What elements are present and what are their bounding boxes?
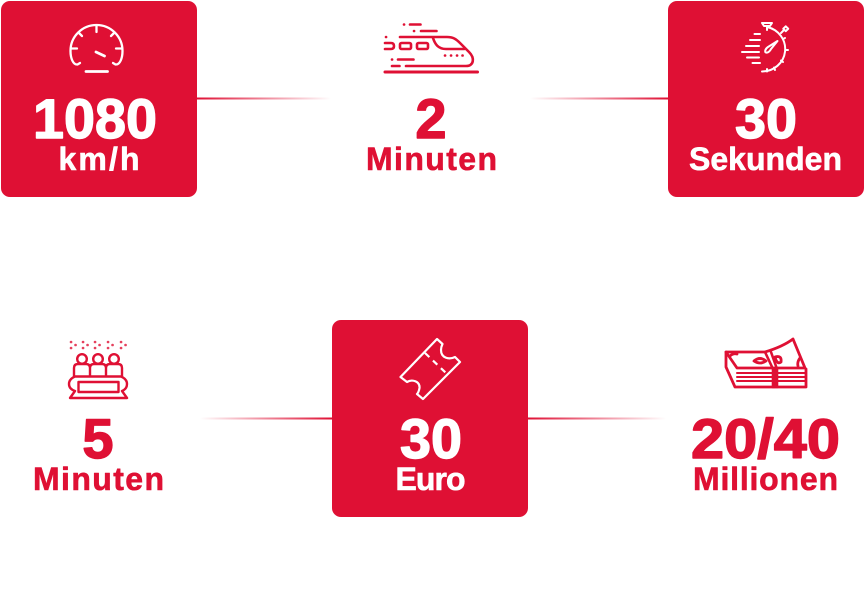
panel: 20/40 Millionen bbox=[691, 339, 840, 497]
icon: stopwatch bbox=[742, 23, 788, 72]
panel: 5 Minuten bbox=[33, 342, 164, 497]
value: 1080: 1080 bbox=[33, 87, 157, 150]
panel: 1080 km/h bbox=[1, 1, 197, 197]
icon: passengers in capsule bbox=[69, 342, 127, 398]
panel: 30 Euro bbox=[332, 320, 528, 517]
connector: boarding to price bbox=[200, 418, 332, 420]
label: Euro: Euro bbox=[396, 461, 466, 497]
connector: price to cost bbox=[528, 418, 666, 420]
label: Sekunden: Sekunden bbox=[689, 141, 842, 177]
icon: speedometer bbox=[70, 25, 122, 72]
connector: speed to travel time bbox=[197, 98, 331, 100]
icon: stack of banknotes bbox=[726, 339, 806, 387]
panel: 30 Sekunden bbox=[668, 1, 864, 197]
value: 5: 5 bbox=[82, 407, 114, 470]
label: km/h: km/h bbox=[58, 141, 140, 177]
connector: travel time to acceleration bbox=[530, 98, 668, 100]
icon: ticket bbox=[400, 339, 460, 399]
label: Minuten: Minuten bbox=[366, 141, 497, 177]
panel: 2 Minuten bbox=[366, 24, 497, 177]
label: Minuten: Minuten bbox=[33, 461, 164, 497]
value: 30: 30 bbox=[400, 407, 462, 470]
value: 20/40: 20/40 bbox=[691, 407, 840, 470]
icon: high-speed train bbox=[385, 24, 478, 72]
label: Millionen: Millionen bbox=[693, 461, 838, 497]
value: 30: 30 bbox=[735, 87, 797, 150]
value: 2: 2 bbox=[415, 87, 447, 150]
